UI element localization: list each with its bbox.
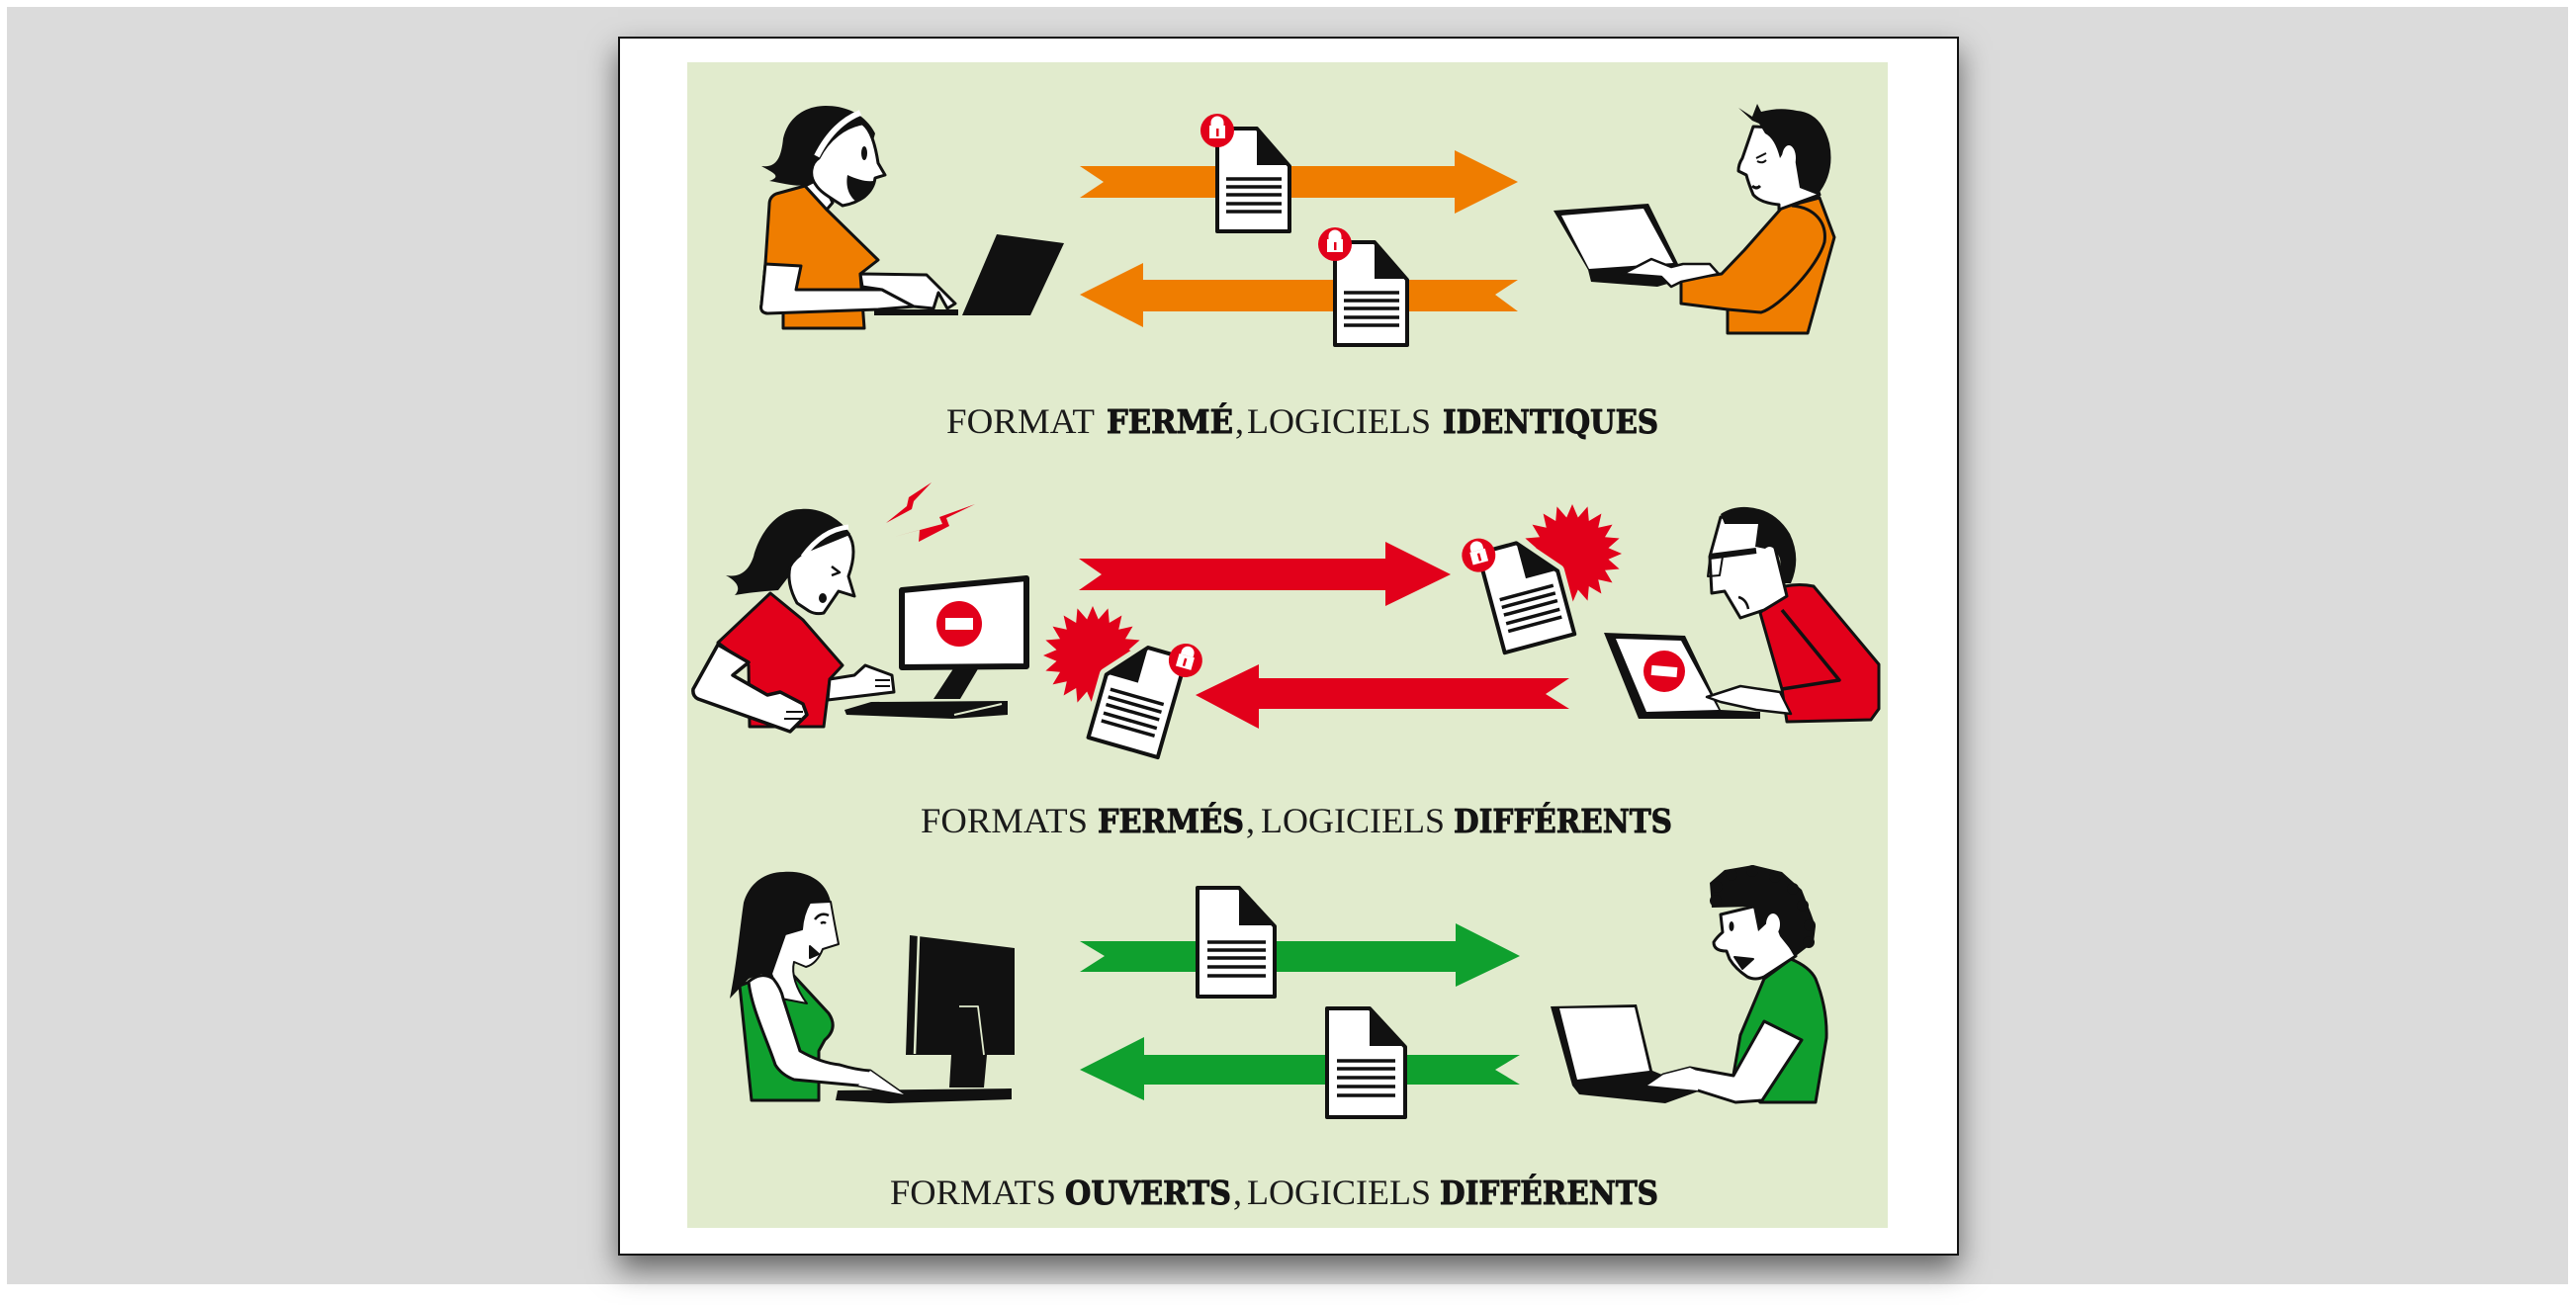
caption 1: LOGICIELS bbox=[1247, 401, 1431, 441]
arrow: green left bbox=[1080, 1037, 1520, 1100]
document: rejected, right bbox=[1458, 520, 1574, 657]
document: rejected, left bbox=[1089, 625, 1206, 762]
document: open, bottom bbox=[1327, 1008, 1405, 1117]
person: angry woman, red bbox=[693, 509, 894, 732]
caption 2: , bbox=[1246, 801, 1255, 840]
icon: desktop computer back bbox=[836, 935, 1015, 1103]
caption 2: FERMÉS bbox=[1098, 801, 1244, 840]
person: man with laptop, orange bbox=[1554, 104, 1834, 333]
caption 1: IDENTIQUES bbox=[1443, 402, 1658, 441]
arrow: red right bbox=[1079, 542, 1451, 606]
person: woman with laptop, orange bbox=[761, 106, 1064, 328]
caption 3: FORMATS bbox=[890, 1173, 1056, 1212]
person: angry man with glasses, red bbox=[1604, 507, 1879, 722]
icon: monitor with no-entry sign bbox=[844, 578, 1026, 719]
white card bbox=[618, 37, 1959, 1256]
arrow: orange left bbox=[1080, 263, 1518, 327]
caption 2: DIFFÉRENTS bbox=[1454, 801, 1672, 840]
caption 3: OUVERTS bbox=[1065, 1174, 1231, 1212]
caption 3: LOGICIELS bbox=[1247, 1173, 1431, 1212]
caption 1: FERMÉ bbox=[1107, 401, 1233, 441]
document: locked, top bbox=[1200, 114, 1289, 231]
icon: anger lightning bolts bbox=[886, 482, 975, 542]
arrow: green right bbox=[1080, 923, 1520, 987]
caption 3: DIFFÉRENTS bbox=[1440, 1173, 1658, 1212]
caption 1: , bbox=[1235, 401, 1244, 441]
person: woman at desktop, green bbox=[730, 872, 904, 1100]
document: locked, bottom bbox=[1318, 227, 1407, 345]
icon: red burst right bbox=[1523, 504, 1622, 603]
caption 3: , bbox=[1233, 1173, 1242, 1212]
arrow: red left bbox=[1196, 664, 1569, 729]
green panel bbox=[687, 62, 1888, 1228]
icon: red burst left bbox=[1043, 606, 1142, 705]
person: curly-haired man with laptop, green bbox=[1551, 865, 1826, 1103]
caption 2: LOGICIELS bbox=[1261, 801, 1445, 840]
document: open, top bbox=[1198, 888, 1275, 997]
caption 2: FORMATS bbox=[921, 801, 1088, 840]
arrow: orange right bbox=[1080, 150, 1518, 214]
caption 1: FORMAT bbox=[946, 401, 1095, 441]
